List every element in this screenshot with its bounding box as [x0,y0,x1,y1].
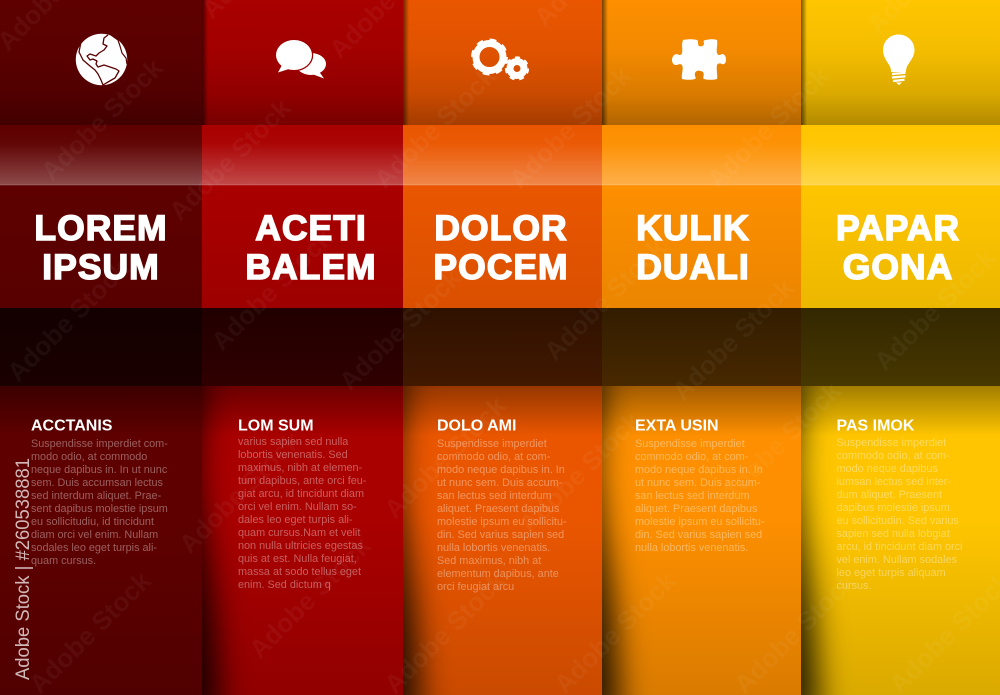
text block: PAS IMOK: dapibus molestie ipsum [836,502,950,514]
text block: DOLO AMI: Sed maximus, nibh at [437,555,541,567]
text block: LOM SUM: orci vel enim. Nullam so- [238,501,357,513]
text block: DOLO AMI: elementum dapibus, ante [437,568,559,580]
text block: LOM SUM: quam cursus.Nam et velit [238,527,360,539]
text block: LOM SUM: dales leo eget turpis ali- [238,514,353,526]
text block: ACCTANIS: sodales leo eget turpis ali- [31,542,157,554]
text block: ACCTANIS [31,418,168,567]
watermark: Adobe Stock pattern: Adobe Stock [35,52,169,186]
panel: column 3 background [403,0,602,695]
text block: LOM SUM: LOM SUM [238,418,314,434]
heading: ACETI BALEM: BALEM [245,247,377,287]
heading: LOREM IPSUM: LOREM [34,208,168,248]
watermark: Adobe Stock pattern: Adobe Stock [513,405,647,539]
icon: globe [76,34,127,85]
text block: PAS IMOK: cursus. [836,580,871,592]
text block: ACCTANIS: sent dapibus molestie ipsum [31,503,168,515]
text block: DOLO AMI: ut nunc sem. Duis accum- [437,477,563,489]
text block: PAS IMOK: commodo odio, at com- [836,450,950,462]
text block: EXTA USIN: EXTA USIN [635,418,719,434]
text block: DOLO AMI: san lectus sed interdum [437,490,552,502]
heading: ACETI BALEM [245,208,377,287]
text block: DOLO AMI: molestie ipsum eu sollicitu- [437,516,567,528]
text block: LOM SUM: lobortis venenatis. Sed [238,449,348,461]
text block: PAS IMOK: arcu, id tincidunt diam orci [836,541,962,553]
text block: LOM SUM: enim. Sed dictum q [238,579,331,591]
text block: EXTA USIN: ut nunc sem. Duis accum- [635,477,761,489]
text block: EXTA USIN: modo neque dapibus in. In [635,464,763,476]
watermark: Adobe Stock pattern: Adobe Stock [666,272,800,406]
text block: DOLO AMI [437,418,567,593]
panel: column 2 background [202,0,403,695]
text block: LOM SUM [238,418,367,591]
text block: DOLO AMI: Suspendisse imperdiet [437,438,547,450]
text block: ACCTANIS: sed interdum aliquet. Prae- [31,490,162,502]
heading: PAPAR GONA [836,208,960,287]
heading: LOREM IPSUM: IPSUM [42,247,160,287]
label: vertical stock id: Adobe Stock | #260538881 [12,458,34,680]
watermark: Adobe Stock pattern: Adobe Stock [378,390,512,524]
heading: PAPAR GONA: GONA [843,247,953,287]
text block: EXTA USIN: san lectus sed interdum [635,490,750,502]
watermark: Adobe Stock pattern: Adobe Stock [868,242,1000,376]
text block: EXTA USIN [635,418,765,554]
panel: column 4 background [602,0,801,695]
text block: DOLO AMI: commodo odio, at com- [437,451,551,463]
text block: DOLO AMI: din. Sed varius sapien sed [437,529,564,541]
watermark: Adobe Stock pattern: Adobe Stock [701,60,835,194]
watermark: Adobe Stock pattern: Adobe Stock [368,60,502,194]
text block: PAS IMOK: sapien sed nulla lobgiat [836,528,950,540]
text block: LOM SUM: varius sapien sed nulla [238,436,349,448]
watermark: Adobe Stock pattern: Adobe Stock [538,232,672,366]
icon: gears [472,40,528,79]
text block: PAS IMOK: dum aliquet. Praesent [836,489,942,501]
text block: EXTA USIN: Suspendisse imperdiet [635,438,745,450]
heading: DOLOR POCEM: POCEM [433,247,569,287]
text block: PAS IMOK: vel enim. Nullam sodales [836,554,958,566]
text block: DOLO AMI: DOLO AMI [437,418,516,434]
text block: ACCTANIS: ACCTANIS [31,418,113,434]
text block: PAS IMOK: PAS IMOK [836,418,915,434]
heading: KULIK DUALI: KULIK [636,208,750,248]
text block: ACCTANIS: quam cursus. [31,555,96,567]
icon: light bulb [883,34,914,85]
watermark: Adobe Stock pattern: Adobe Stock [503,60,637,194]
text block: LOM SUM: giat arcu, id tincidunt diam [238,488,364,500]
text block: PAS IMOK: iumsan lectus sed inter- [836,476,951,488]
icon: speech bubbles [276,40,326,78]
watermark: Adobe Stock pattern: Adobe Stock [333,262,467,396]
icon: puzzle piece [672,39,726,80]
text block: LOM SUM: tum dapibus, ante orci feu- [238,475,367,487]
heading: PAPAR GONA: PAPAR [836,208,960,248]
watermark: Adobe Stock pattern: Adobe Stock [713,375,847,509]
watermark: Adobe Stock pattern: Adobe Stock [163,92,297,226]
heading: KULIK DUALI: DUALI [636,247,750,287]
text block: LOM SUM: quis at est. Nulla feugiat, [238,553,357,565]
text block: ACCTANIS: eu sollicitudiu, id tincidunt [31,516,154,528]
text block: ACCTANIS: neque dapibus in. In ut nunc [31,464,168,476]
panel: column 5 background [801,0,1000,695]
text block: PAS IMOK: eu sollicitudin. Sed varius [836,515,959,527]
text block: EXTA USIN: commodo odio, at com- [635,451,749,463]
text block: ACCTANIS: sem. Duis accumsan lectus [31,477,164,489]
text block: PAS IMOK: Suspendisse imperdiet [836,437,946,449]
watermark: Adobe Stock pattern: Adobe Stock [1,253,135,387]
text block: PAS IMOK: leo eget turpis aliquam [836,567,946,579]
text block: DOLO AMI: modo neque dapibus in. In [437,464,565,476]
watermark: Adobe Stock pattern: Adobe Stock [205,222,339,356]
text block: DOLO AMI: orci feugiat arcu [437,581,514,593]
text block: DOLO AMI: nulla lobortis venenatis. [437,542,550,554]
heading: LOREM IPSUM [34,208,168,287]
text block: PAS IMOK [836,418,962,592]
text block: LOM SUM: maximus, nibh at elemen- [238,462,363,474]
text block: EXTA USIN: din. Sed varius sapien sed [635,529,762,541]
text block: LOM SUM: massa at sodo tellus eget [238,566,361,578]
text block: DOLO AMI: aliquet. Praesent dapibus [437,503,560,515]
text block: ACCTANIS: modo odio, at commodo [31,451,147,463]
heading: DOLOR POCEM: DOLOR [434,208,568,248]
watermark: Adobe Stock pattern: Adobe Stock [173,425,307,559]
text block: PAS IMOK: modo neque dapibus [836,463,938,475]
panel: column 1 background [0,0,202,695]
text block: EXTA USIN: molestie ipsum eu sollicitu- [635,516,765,528]
watermark: Adobe Stock pattern: Adobe Stock [243,530,377,664]
text block: EXTA USIN: nulla lobortis venenatis. [635,542,748,554]
heading: KULIK DUALI [636,208,750,287]
text block: LOM SUM: non nulla ultricies egestas [238,540,363,552]
text block: EXTA USIN: aliquet. Praesent dapibus [635,503,758,515]
text block: ACCTANIS: diam orci vel enim. Nullam [31,529,158,541]
heading: DOLOR POCEM [433,208,569,287]
heading: ACETI BALEM: ACETI [255,208,367,248]
text block: ACCTANIS: Suspendisse imperdiet com- [31,438,168,450]
